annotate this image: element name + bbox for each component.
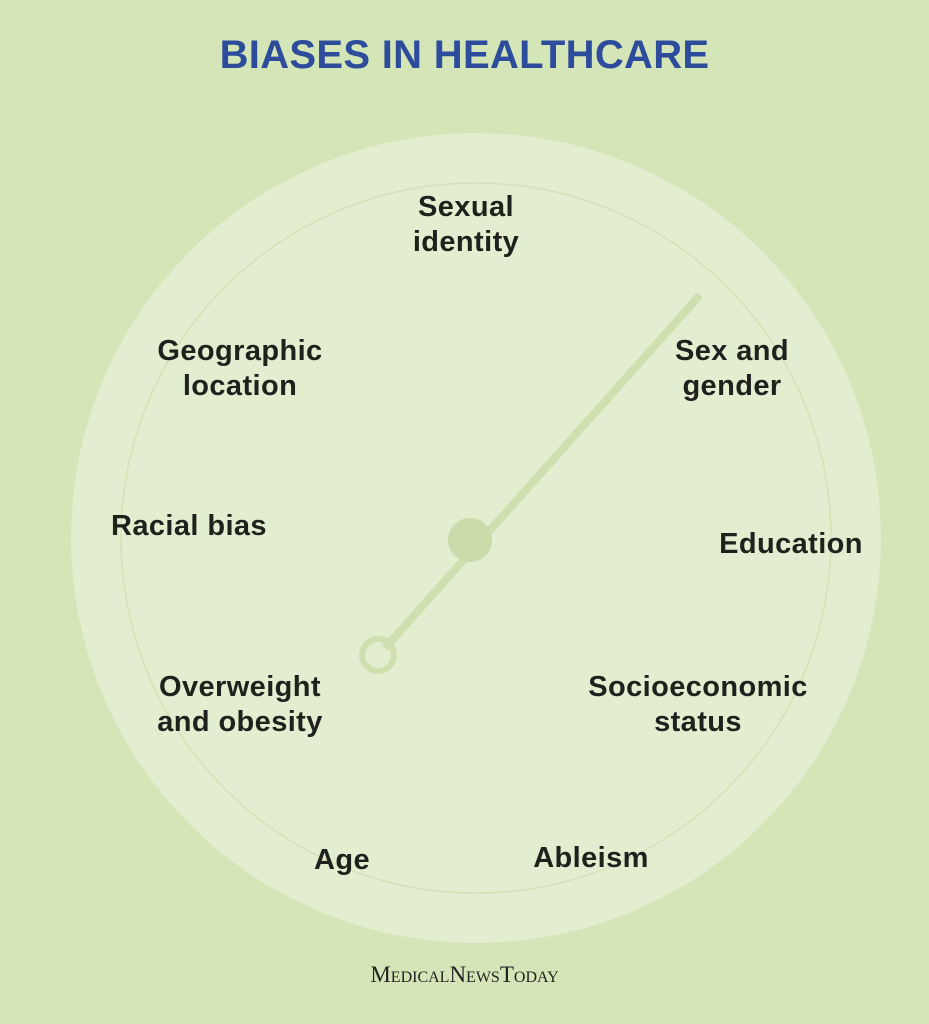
label: education: Education bbox=[719, 528, 863, 560]
needle bbox=[362, 295, 700, 671]
label: sexual identity: identity bbox=[413, 226, 519, 258]
title: BIASES IN HEALTHCARE bbox=[220, 33, 709, 77]
label: geographic location: Geographic bbox=[157, 335, 323, 367]
label: geographic location: location bbox=[183, 370, 297, 402]
label: overweight: Overweight bbox=[159, 671, 321, 703]
label: overweight bbox=[157, 671, 323, 738]
label: sex and gender: gender bbox=[682, 370, 782, 402]
label: geographic location bbox=[157, 335, 323, 402]
label: sex and gender: Sex and bbox=[675, 335, 789, 367]
label: socioeconomic bbox=[588, 671, 808, 738]
label: sexual identity: Sexual bbox=[418, 191, 514, 223]
label: age: Age bbox=[314, 844, 370, 876]
label: sex and gender bbox=[675, 335, 789, 402]
label: ableism: Ableism bbox=[533, 842, 649, 874]
label: overweight: and obesity bbox=[157, 706, 323, 738]
label: sexual identity bbox=[413, 191, 519, 258]
label: racial bias: Racial bias bbox=[111, 510, 267, 542]
label: socioeconomic: Socioeconomic bbox=[588, 671, 808, 703]
logo: MedicalNewsToday bbox=[370, 962, 559, 987]
label: socioeconomic: status bbox=[654, 706, 742, 738]
